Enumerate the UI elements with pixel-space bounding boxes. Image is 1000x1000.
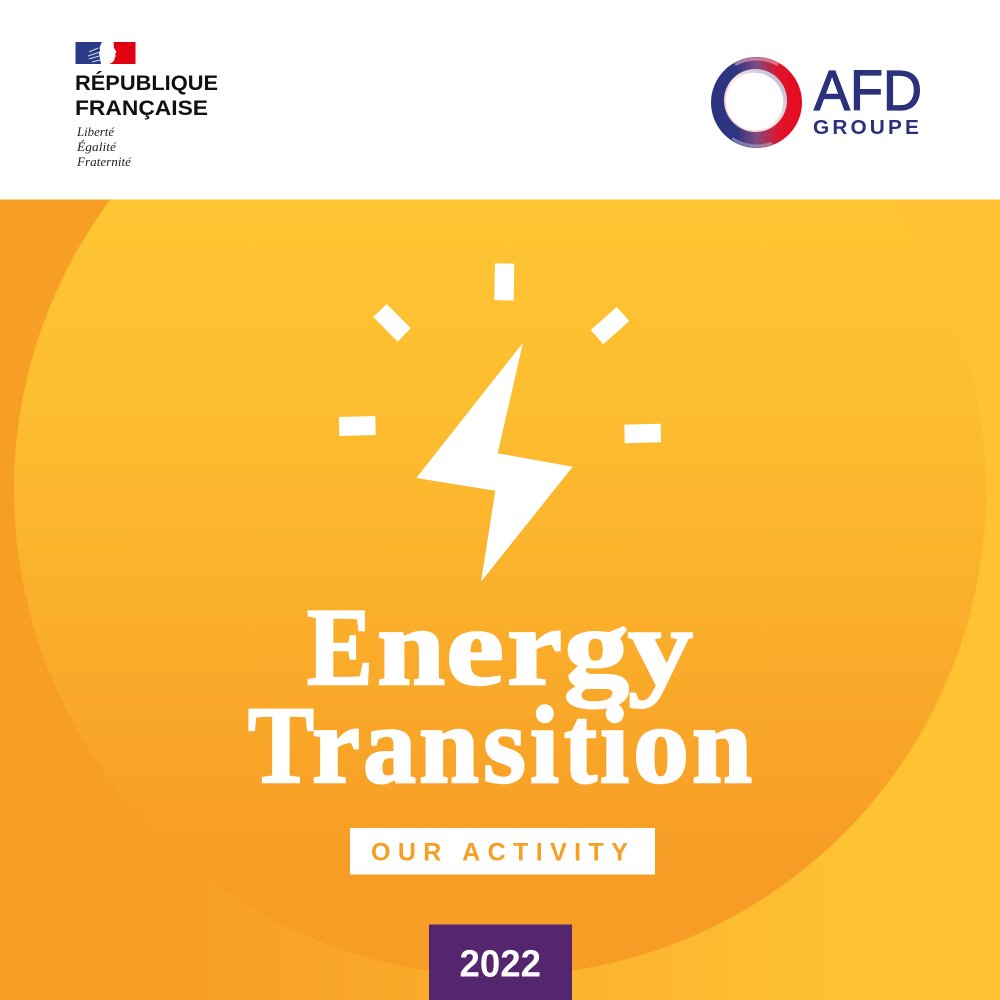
subtitle text: OUR ACTIVITY: [371, 838, 635, 866]
title line: Transition: n: [692, 684, 752, 806]
heading: Française: FRANÇAISE: [75, 97, 208, 120]
icon: ray upper left: [373, 304, 411, 342]
icon: lightning bolt with rays: [339, 263, 661, 582]
title line: Transition: T: [248, 684, 314, 806]
icon: bolt: [416, 343, 573, 582]
title line: Transition: n: [419, 684, 479, 806]
motto: Fraternité: Fraternité: [76, 155, 131, 169]
year badge: [429, 924, 572, 1000]
title: [248, 586, 752, 806]
icon: ray top: [494, 263, 514, 301]
icon: AFD ring: [711, 57, 802, 148]
icon: ray upper right: [591, 307, 629, 344]
motto: Égalité: Égalité: [76, 140, 116, 154]
title line: Energy: E: [307, 586, 373, 708]
title line: Transition: a: [363, 684, 416, 806]
icon: French flag Marianne: [76, 42, 136, 64]
motto: Liberté: Liberté: [76, 125, 114, 139]
logo: République Française: [75, 42, 218, 169]
logo: AFD Groupe: [711, 57, 922, 148]
title line: Energy: n: [377, 586, 445, 708]
icon: ray left: [339, 416, 376, 436]
title line: Transition: i: [600, 684, 629, 806]
icon: ray right: [624, 424, 661, 443]
title line: Energy: r: [507, 586, 562, 708]
wordmark: AFD: AFD: [814, 59, 922, 123]
title line: Energy: g: [564, 586, 629, 708]
title line: Energy: e: [446, 586, 504, 708]
title line: Transition: o: [633, 684, 689, 806]
year text: 2022: [460, 944, 541, 986]
subtitle badge: [350, 828, 655, 874]
title line: Energy: y: [628, 586, 693, 708]
title line: Transition: i: [530, 684, 559, 806]
title line: Transition: t: [564, 684, 597, 806]
title line: Transition: r: [312, 684, 360, 806]
wordmark: Groupe: GROUPE: [813, 117, 922, 139]
heading: République: RÉPUBLIQUE: [75, 72, 218, 95]
title line: Transition: s: [483, 684, 526, 806]
